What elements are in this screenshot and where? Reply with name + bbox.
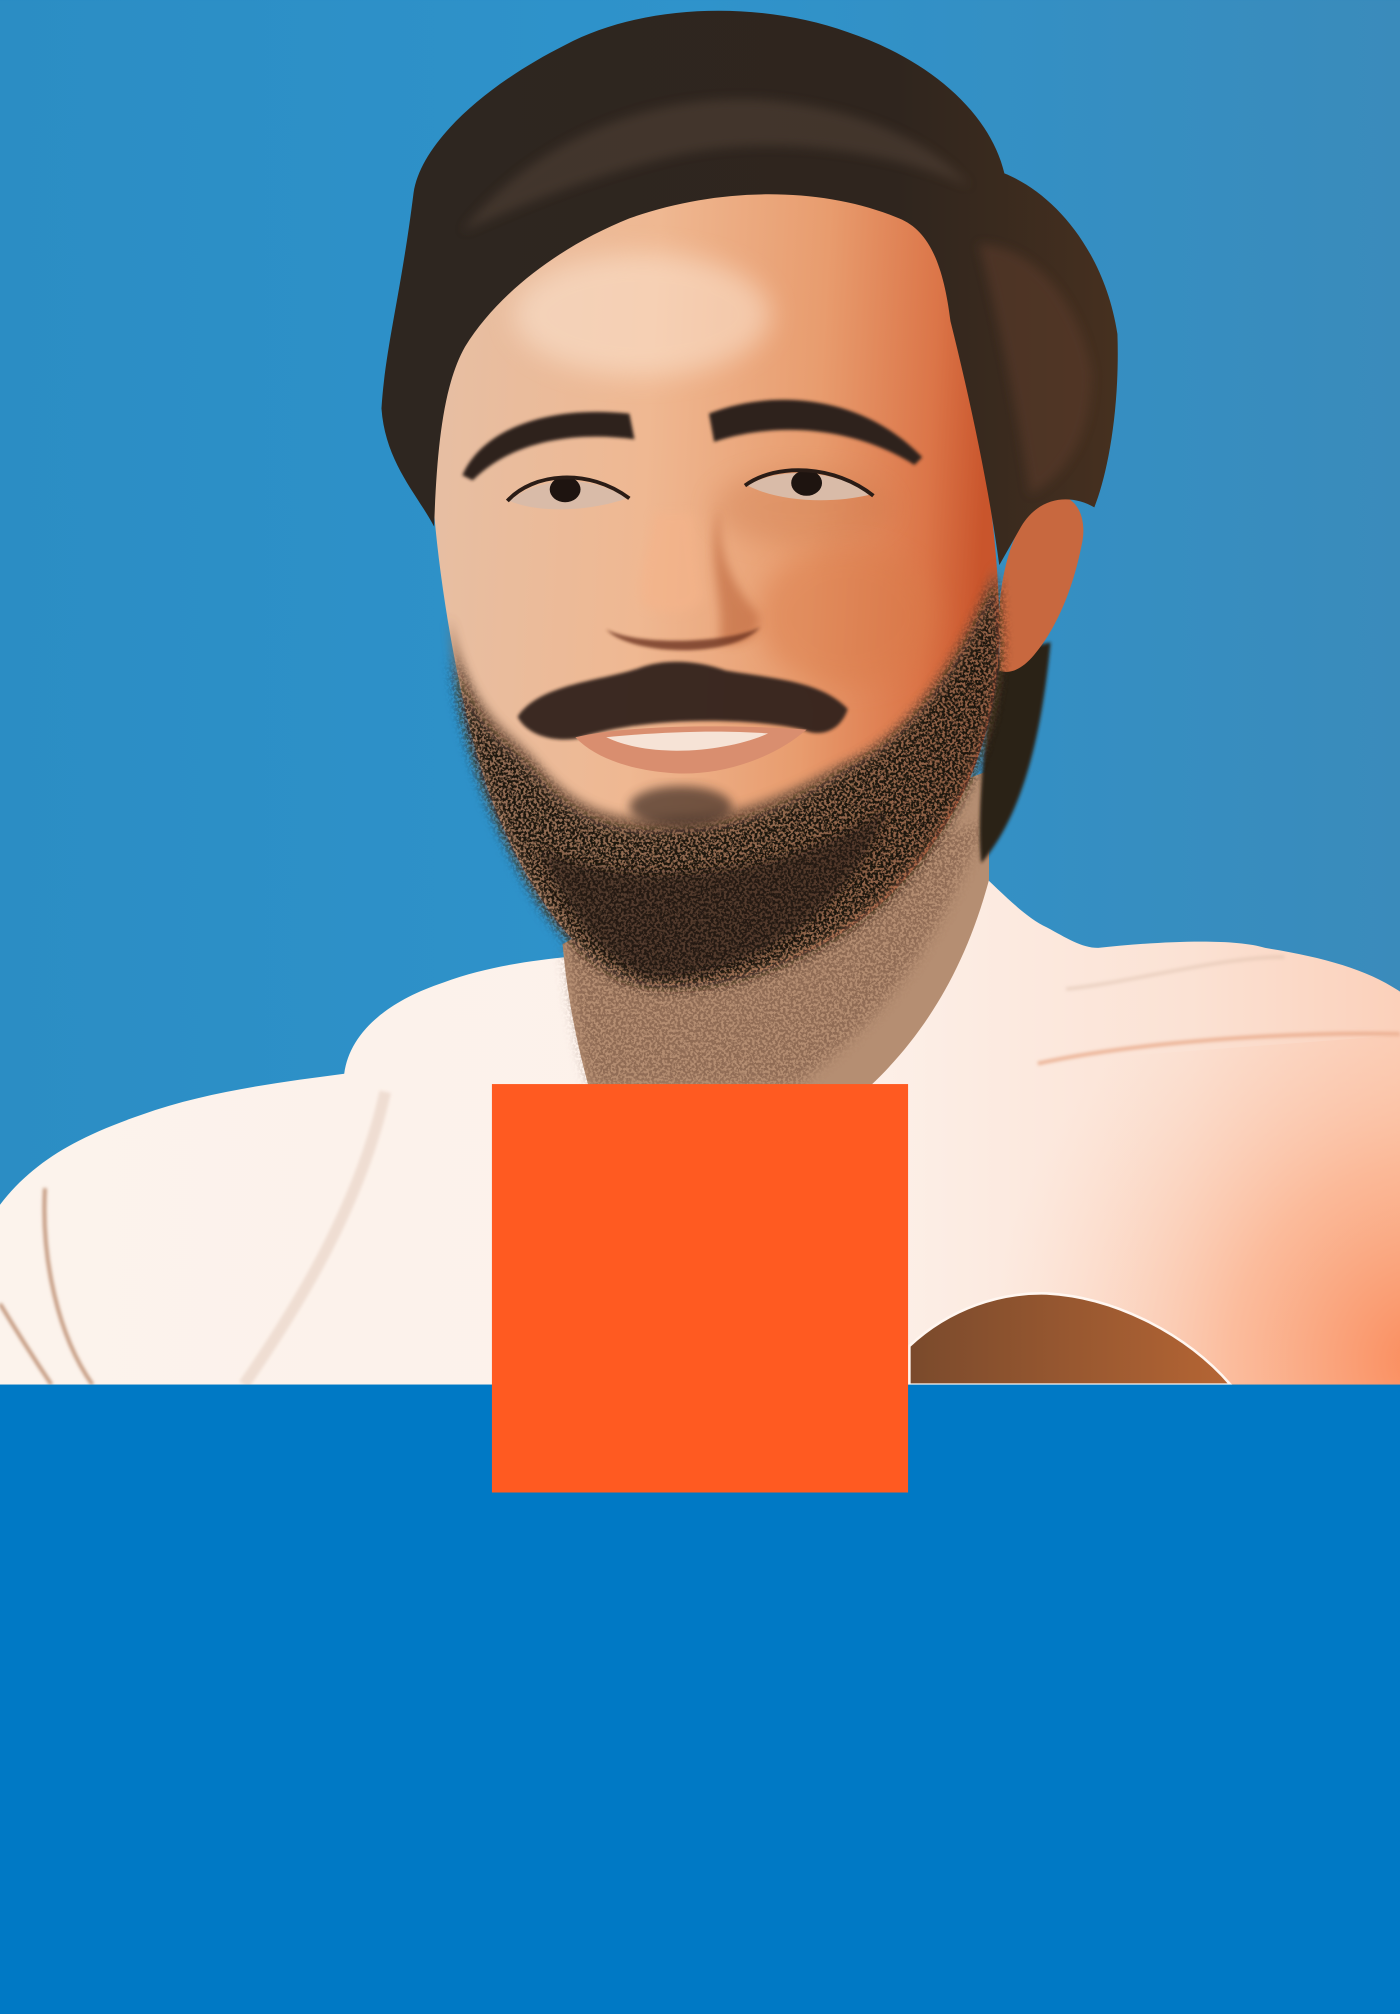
shirt folds bbox=[0, 957, 1400, 1385]
back hair below ear bbox=[980, 642, 1051, 863]
white t-shirt bbox=[0, 879, 1400, 1385]
nose shadow bbox=[606, 627, 760, 650]
cheek warm tone bbox=[758, 546, 938, 687]
beard base tone bbox=[450, 565, 1001, 988]
orange square bbox=[492, 1084, 908, 1493]
smile and teeth bbox=[575, 726, 807, 774]
arm bbox=[909, 1293, 1230, 1385]
hair highlight bbox=[462, 99, 970, 231]
neck stubble bbox=[565, 822, 983, 1085]
hair bbox=[381, 11, 1118, 565]
left eye bbox=[507, 477, 629, 509]
blue lower panel bbox=[0, 1385, 1400, 2014]
neck bbox=[563, 771, 989, 1085]
chin patch bbox=[629, 786, 732, 827]
right eye bbox=[745, 470, 873, 500]
right eyebrow bbox=[709, 400, 922, 465]
person bbox=[0, 11, 1400, 1385]
hair side tint bbox=[979, 244, 1092, 495]
blue photo backdrop bbox=[0, 0, 1400, 1385]
beard stubble bbox=[452, 578, 1001, 988]
left eyebrow bbox=[462, 412, 634, 480]
nose highlight bbox=[640, 514, 704, 613]
dense chin beard bbox=[539, 809, 886, 979]
nose side shadow bbox=[714, 507, 759, 644]
moustache bbox=[518, 662, 848, 740]
eye socket shading bbox=[713, 469, 893, 546]
warm light on sleeve bbox=[989, 1035, 1400, 1385]
ear bbox=[999, 496, 1083, 672]
face bbox=[434, 167, 999, 985]
forehead highlight bbox=[514, 253, 771, 376]
